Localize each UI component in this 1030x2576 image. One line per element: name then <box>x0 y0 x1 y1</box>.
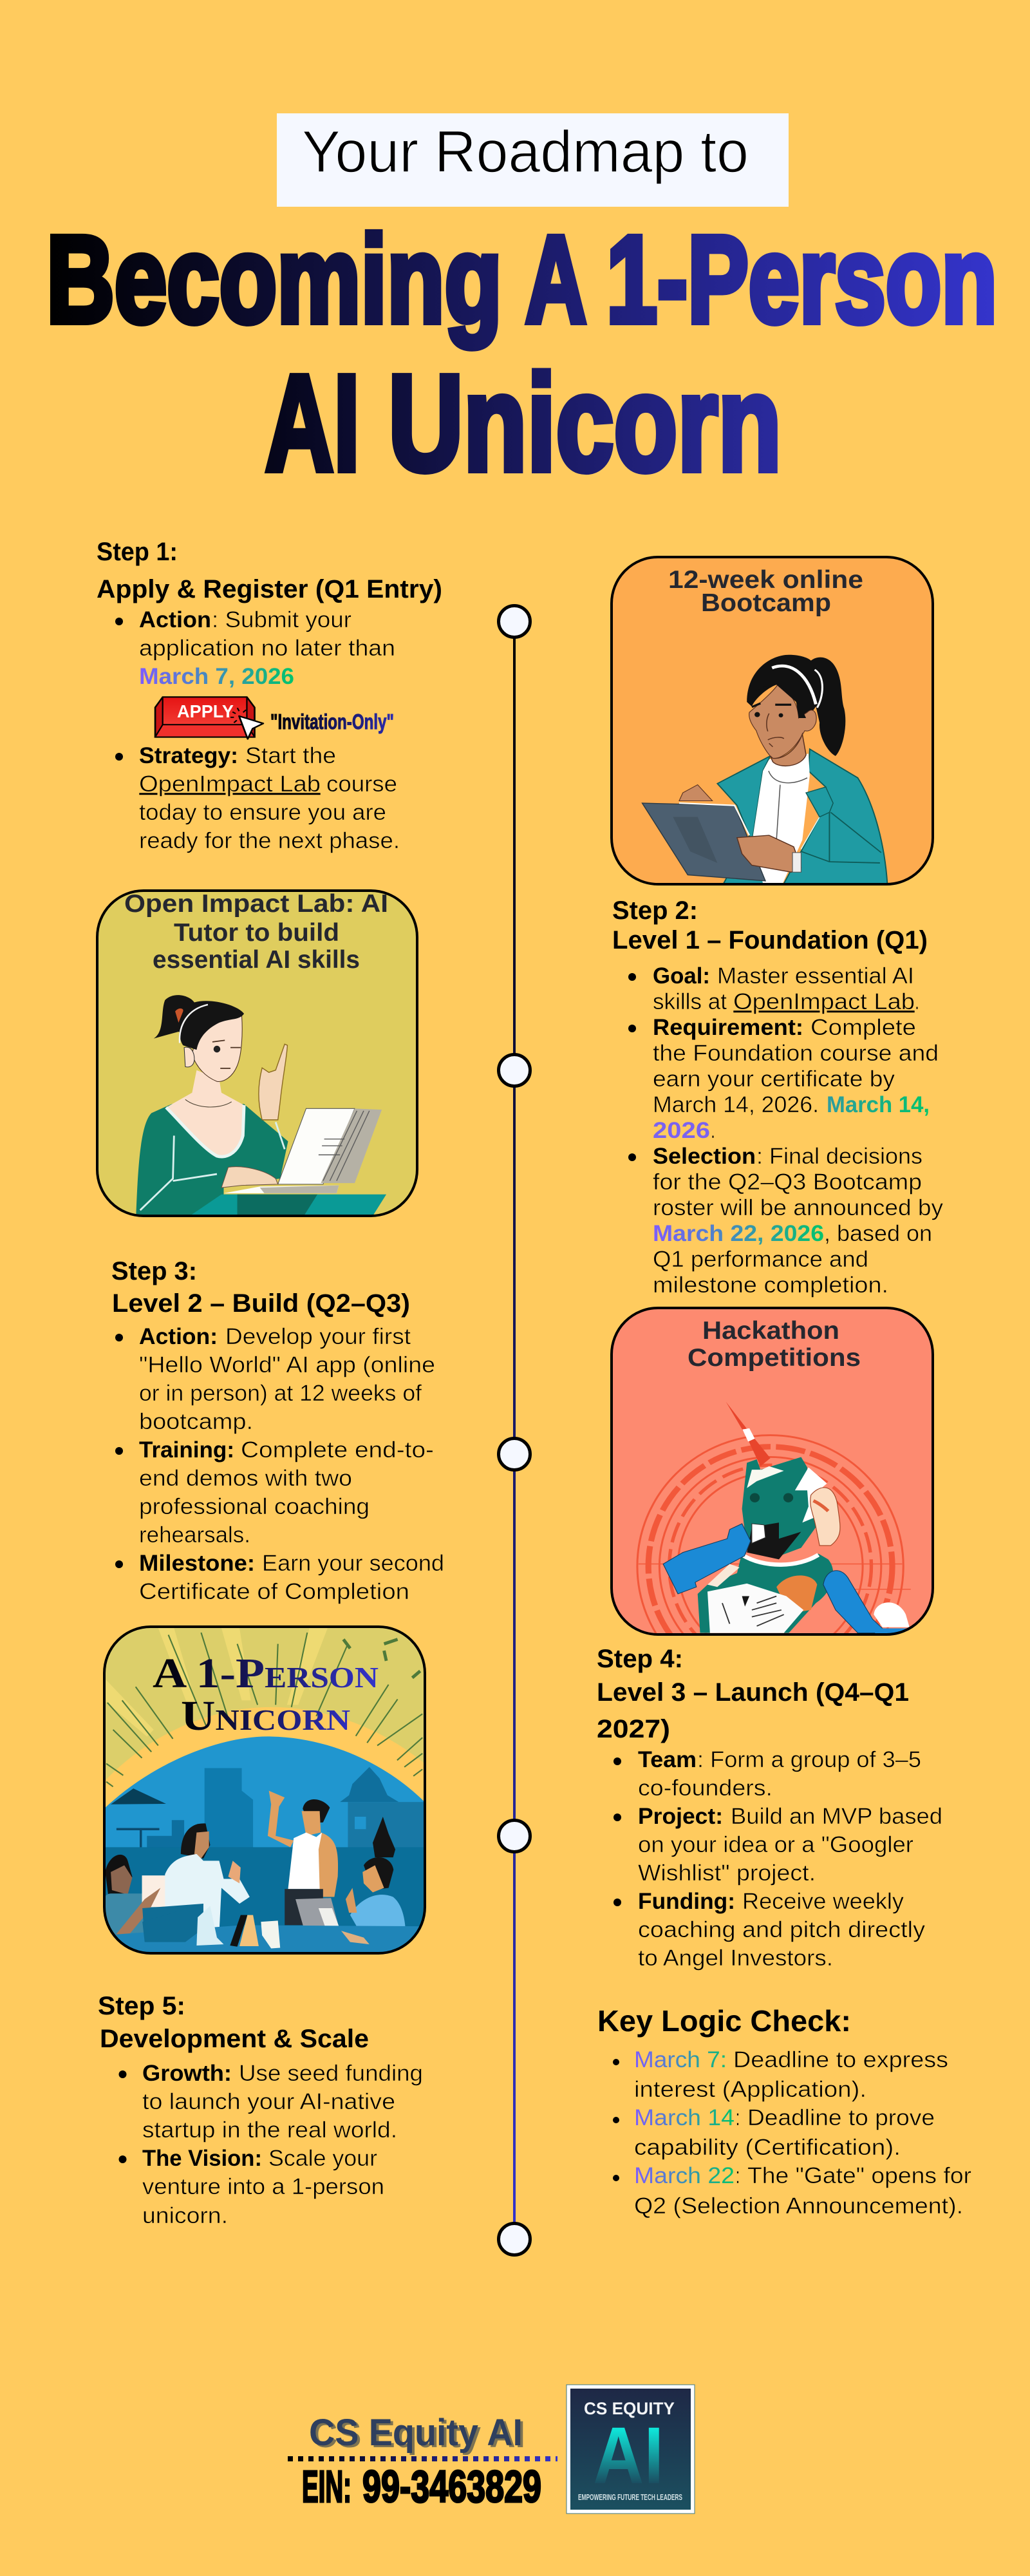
text block: the vision: The Vision: <box>142 2146 262 2171</box>
illustration: woman at laptop <box>136 995 386 1216</box>
timeline node 4 <box>498 1820 530 1852</box>
heading: step 2: Level 1 – Foundation (Q1) <box>612 926 928 954</box>
text block: funding: Funding: <box>638 1889 735 1914</box>
text block: action: "Hello World" AI app (online <box>139 1352 435 1378</box>
text block: selection <box>628 1144 944 1298</box>
image caption: Hackathon <box>702 1317 839 1345</box>
footer <box>288 2385 695 2514</box>
heading: step 4: Step 4: <box>597 1645 683 1673</box>
text block: action <box>115 607 395 689</box>
heading: step 2: Step 2: <box>612 896 698 925</box>
subtitle banner: Your Roadmap to <box>302 119 749 185</box>
text block: goal: OpenImpact Lab <box>733 989 915 1014</box>
image caption: essential AI skills <box>153 946 360 974</box>
image caption <box>124 890 388 974</box>
logo: CS Equity AI: CS EQUITY <box>584 2399 675 2418</box>
image caption: 12-week online <box>668 566 863 594</box>
text block: project: Wishlist" project. <box>638 1861 816 1886</box>
text block: training: Complete end-to- <box>241 1437 434 1463</box>
text block: training: Training: <box>139 1437 234 1463</box>
text block: requirement: 2026 <box>653 1118 710 1143</box>
text block: march 22 <box>613 2163 971 2219</box>
text block: action: Action <box>139 607 211 632</box>
timeline node 5 <box>498 2223 530 2255</box>
text block: training: rehearsals. <box>139 1522 250 1548</box>
text block: milestone: Earn your second <box>262 1551 444 1576</box>
logo: CS Equity AI: EMPOWERING FUTURE TECH LEADERS <box>578 2492 682 2502</box>
image caption <box>688 1317 861 1372</box>
text block: march 14: : <box>735 2105 740 2130</box>
text block: action: application no later than <box>139 636 395 661</box>
logo: CS Equity AI: AI <box>593 2411 664 2501</box>
text block: strategy: Strategy: <box>139 743 238 768</box>
text block: selection: Q1 performance and <box>653 1247 868 1272</box>
text block: milestone: Certificate of Completion <box>139 1579 409 1604</box>
panel: 12-week online bootcamp image <box>612 557 933 884</box>
text block: team: : Form a group of 3–5 <box>697 1747 921 1772</box>
text block: action: bootcamp. <box>139 1409 253 1434</box>
heading: step 4 <box>597 1645 909 1743</box>
text block: march 14: March 14 <box>634 2105 735 2130</box>
text block: action: Develop your first <box>225 1324 411 1349</box>
image outline <box>104 1627 425 1953</box>
text block: growth <box>118 2061 423 2143</box>
image caption: Unicorn <box>181 1692 350 1739</box>
text block: team: Team <box>638 1747 697 1772</box>
text block: requirement: Complete <box>810 1015 916 1040</box>
text block: funding: Receive weekly <box>742 1889 904 1914</box>
text block: the vision: venture into a 1-person <box>142 2174 384 2199</box>
footer brand name: CS Equity AI <box>312 2414 525 2456</box>
panel: step 5 <box>98 1992 423 2228</box>
text block: march 7: March 7: <box>634 2047 727 2072</box>
text block: requirement: March 14, <box>827 1092 930 1117</box>
text block: march 22: The "Gate" opens for <box>747 2163 971 2188</box>
text block: requirement: Requirement: <box>653 1015 803 1040</box>
text block: strategy: Start the <box>245 743 336 768</box>
text block: growth: Use seed funding <box>239 2061 423 2086</box>
heading line 2: Unicorn <box>388 346 782 499</box>
heading: step 5 <box>98 1992 369 2053</box>
illustration: team in city <box>104 1628 425 1956</box>
heading line 2 <box>265 346 782 499</box>
text block: march 7: interest (Application). <box>634 2077 866 2102</box>
text block: milestone <box>115 1551 444 1604</box>
EIN number: EIN: <box>302 2461 351 2512</box>
text block: action <box>115 1324 435 1434</box>
heading: step 5: Step 5: <box>98 1992 185 2020</box>
text block: march 14: capability (Certification). <box>634 2135 901 2160</box>
text block: strategy: course <box>326 772 397 797</box>
text block: goal: . <box>915 989 919 1014</box>
text block: project <box>613 1804 942 1886</box>
image outline <box>97 891 417 1216</box>
logo: CS Equity AI <box>566 2385 695 2514</box>
text block: march 7: Deadline to express <box>733 2047 948 2072</box>
heading line 1 <box>46 210 997 348</box>
panel: key logic check <box>597 2004 971 2219</box>
text block: action: Action: <box>139 1324 218 1349</box>
panel: step 2 <box>612 896 944 1298</box>
text block: goal: Master essential AI <box>717 963 914 989</box>
title block <box>46 113 997 499</box>
text block: requirement: . <box>711 1118 715 1143</box>
text block: growth: Growth: <box>142 2061 232 2086</box>
text block: march 22: : <box>735 2163 740 2188</box>
heading: step 5: Development & Scale <box>100 2025 369 2053</box>
subtitle banner <box>277 113 789 207</box>
text block: march 14: Deadline to prove <box>747 2105 935 2130</box>
heading: step 4: 2027) <box>597 1715 670 1743</box>
text block: action: or in person) at 12 weeks of <box>139 1381 422 1406</box>
text block: selection: for the Q2–Q3 Bootcamp <box>653 1170 922 1195</box>
heading: step 1: Step 1: <box>97 538 178 566</box>
text block: requirement: earn your certificate by <box>653 1066 895 1092</box>
text block: project: Build an MVP based <box>731 1804 942 1829</box>
heading: step 1 <box>97 538 442 603</box>
illustration: woman with tablet <box>642 655 887 884</box>
text block: selection: Selection <box>653 1144 756 1169</box>
text block: selection: : Final decisions <box>756 1144 922 1169</box>
text block: march 22: March 22 <box>634 2163 735 2188</box>
text block: action: March 7, 2026 <box>139 664 294 689</box>
panel: step 1 <box>97 538 442 853</box>
text block: selection: , based on <box>824 1221 932 1246</box>
text block: goal: Goal: <box>653 963 710 989</box>
icon: apply button <box>155 697 263 739</box>
timeline node 1 <box>498 605 530 638</box>
text block: selection: roster will be announced by <box>653 1195 944 1220</box>
text block: project: on your idea or a "Googler <box>638 1832 913 1857</box>
heading: step 4: Level 3 – Launch (Q4–Q1 <box>597 1678 909 1707</box>
text block: team <box>613 1747 921 1801</box>
image caption: A 1-Person <box>153 1650 379 1697</box>
text block: the vision: unicorn. <box>142 2203 228 2228</box>
heading: step 2 <box>612 896 928 954</box>
EIN number: 99-3463829 <box>362 2461 541 2512</box>
timeline <box>498 605 530 2255</box>
text block: action: : Submit your <box>212 607 351 632</box>
image caption: Bootcamp <box>701 589 831 617</box>
text block: the vision <box>118 2146 384 2228</box>
panel: a 1-person unicorn image <box>104 1627 425 1956</box>
image caption <box>153 1650 379 1739</box>
text block: milestone: Milestone: <box>139 1551 255 1576</box>
image outline <box>612 1308 933 1634</box>
icon: apply button: APPLY <box>177 701 234 721</box>
text block: training: end demos with two <box>139 1466 352 1491</box>
illustration: armored unicorn <box>636 1402 911 1633</box>
text block: goal: skills at <box>653 989 727 1014</box>
text block: funding <box>613 1889 926 1971</box>
text block: funding: to Angel Investors. <box>638 1946 833 1971</box>
image caption: Tutor to build <box>174 919 339 947</box>
text block: strategy <box>115 743 400 853</box>
text block: march 22: Q2 (Selection Announcement). <box>634 2193 963 2219</box>
timeline node 3 <box>498 1439 530 1470</box>
heading line 1: Becoming <box>46 210 502 348</box>
text block: funding: coaching and pitch directly <box>638 1917 926 1942</box>
text block: the vision: Scale your <box>268 2146 377 2171</box>
EIN number <box>302 2461 541 2512</box>
text block: requirement <box>628 1015 939 1143</box>
text block: strategy: OpenImpact Lab <box>139 772 321 797</box>
heading: step 3 <box>111 1257 410 1318</box>
text block: requirement: the Foundation course and <box>653 1041 939 1066</box>
text block: strategy: ready for the next phase. <box>139 828 400 853</box>
heading: step 3: Step 3: <box>111 1257 197 1285</box>
footer brand name: CS Equity AI <box>309 2412 523 2454</box>
panel: step 4 <box>597 1645 942 1971</box>
heading: step 1: Apply & Register (Q1 Entry) <box>97 575 442 603</box>
text block: selection: milestone completion. <box>653 1273 888 1298</box>
image outline <box>612 557 933 884</box>
text block: team: co-founders. <box>638 1776 772 1801</box>
text block: training <box>115 1437 434 1548</box>
text block: selection: March 22, 2026 <box>653 1221 824 1246</box>
panel: hackathon competitions image <box>610 1307 934 1636</box>
heading: key logic check: Key Logic Check: <box>597 2004 851 2038</box>
panel: step 3 <box>111 1257 444 1604</box>
text block: training: professional coaching <box>139 1494 370 1519</box>
heading: step 3: Level 2 – Build (Q2–Q3) <box>112 1289 410 1318</box>
image caption <box>668 566 863 617</box>
text block: march 7 <box>613 2047 948 2102</box>
timeline node 2 <box>498 1055 530 1086</box>
heading line 1: A <box>525 210 586 348</box>
image caption: Open Impact Lab: AI <box>124 890 388 918</box>
text block: growth: to launch your AI-native <box>142 2089 395 2114</box>
heading line 2: AI <box>265 346 360 499</box>
text block: march 14 <box>613 2105 935 2160</box>
label: invitation only: "Invitation-Only" <box>270 710 394 734</box>
text block: goal <box>628 963 919 1014</box>
panel: open impact lab image <box>97 890 417 1216</box>
text block: strategy: today to ensure you are <box>139 800 386 825</box>
text block: requirement: March 14, 2026. <box>653 1092 819 1117</box>
image caption: Competitions <box>688 1344 861 1372</box>
text block: growth: startup in the real world. <box>142 2117 397 2143</box>
text block: project: Project: <box>638 1804 723 1829</box>
